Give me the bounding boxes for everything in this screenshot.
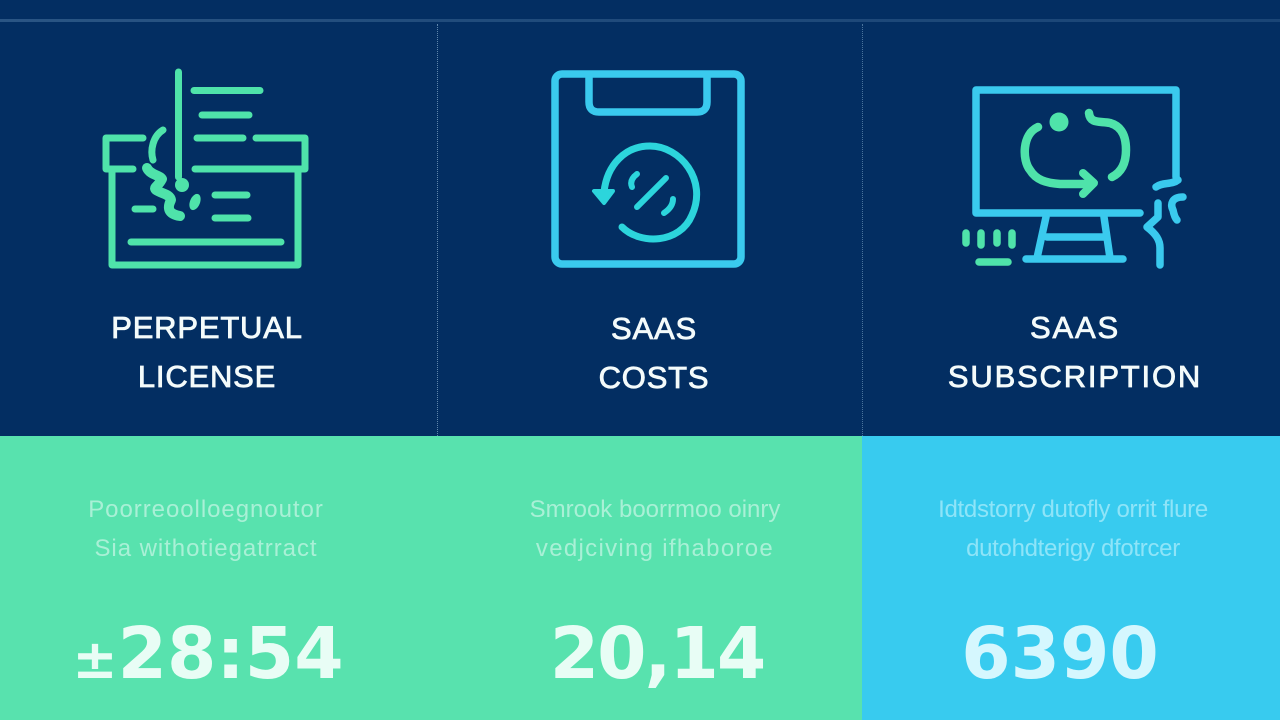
panel: lower blue band [862, 436, 1280, 720]
heading: saas subscription: SUBSCRIPTION [948, 359, 1202, 394]
text block: perpetual description: Sia withotiegatrract [94, 535, 318, 562]
text block: subscription description: dutohdterigy dfotrcer [966, 535, 1180, 562]
text block: perpetual description [88, 496, 324, 562]
heading: saas costs [599, 311, 709, 395]
heading: perpetual license: PERPETUAL [111, 310, 303, 345]
heading: perpetual license: LICENSE [138, 359, 276, 394]
text block: subscription description: Idtdstorry dutofly orrit flure [938, 496, 1208, 523]
heading: saas costs: COSTS [599, 360, 709, 395]
heading: saas subscription: SAAS [1030, 310, 1120, 345]
text block: costs description: Smrook boorrmoo oinry [530, 496, 780, 523]
heading: saas subscription [948, 310, 1202, 394]
top divider line [0, 19, 1280, 22]
number: costs value: 20,14 [550, 612, 764, 695]
text block: perpetual description: Poorreoolloegnoutor [88, 496, 324, 523]
text block: subscription description [938, 496, 1208, 562]
number: perpetual value: ±28:54 [72, 612, 344, 695]
number: subscription value: 6390 [961, 612, 1159, 695]
panel: lower green band [0, 436, 862, 720]
text block: costs description: vedjciving ifhaboroe [536, 535, 774, 562]
column divider right [862, 24, 863, 436]
heading: saas costs: SAAS [611, 311, 697, 346]
column divider left [437, 24, 438, 436]
text block: costs description [530, 496, 780, 562]
heading: perpetual license [111, 310, 303, 394]
